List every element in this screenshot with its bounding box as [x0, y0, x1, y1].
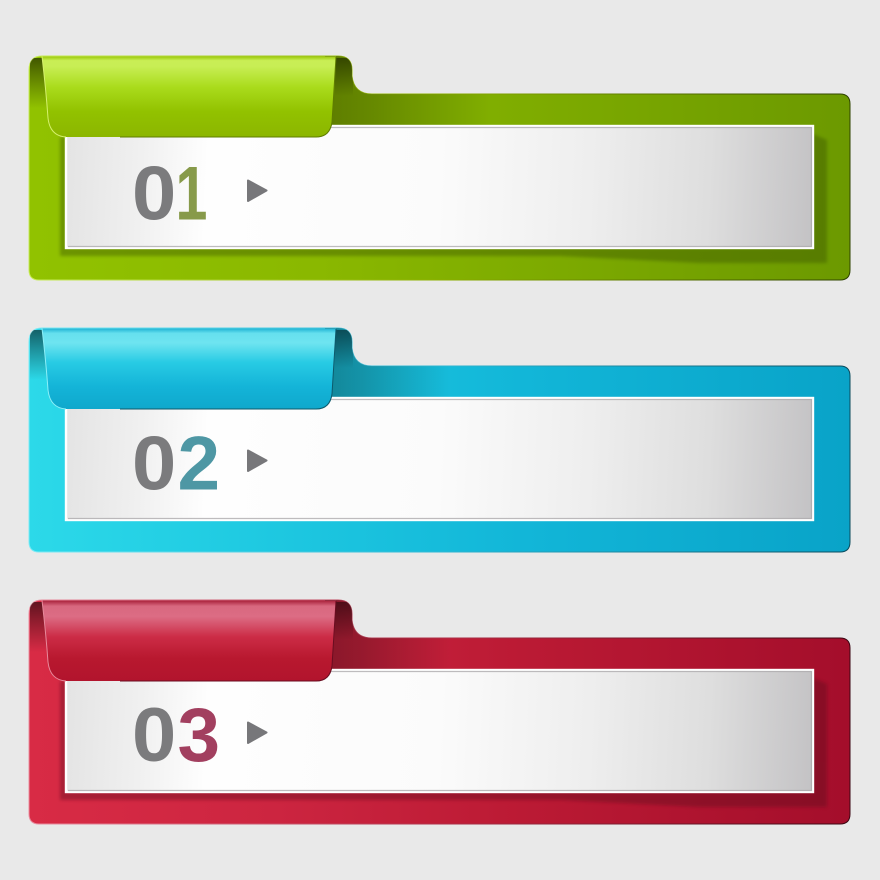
red back frame — [29, 600, 850, 824]
white card — [66, 670, 813, 792]
number 02: 0 — [132, 420, 176, 506]
red folded tab — [42, 600, 336, 681]
number 01 — [132, 150, 207, 236]
green folded tab — [42, 56, 336, 137]
panel: banner 01 green — [29, 56, 850, 280]
number 02 — [132, 420, 220, 506]
white card — [66, 398, 813, 520]
blue folded tab — [42, 328, 336, 409]
panel: banner 03 red — [29, 600, 850, 824]
number 03 — [132, 691, 220, 778]
fold shadows — [30, 56, 827, 263]
blue back frame — [29, 328, 850, 552]
number 01: 0 — [132, 150, 176, 236]
white card — [66, 126, 813, 248]
arrow icon — [248, 450, 266, 471]
number 03: 3 — [178, 693, 220, 778]
arrow icon — [248, 180, 266, 201]
fold shadows — [30, 328, 450, 398]
fold shadows — [30, 600, 827, 807]
number 03: 0 — [132, 691, 176, 778]
arrow icon — [248, 722, 266, 743]
green back frame — [29, 56, 850, 280]
number 01: 1 — [176, 152, 207, 236]
panel: banner 02 blue — [29, 328, 850, 552]
number 02: 2 — [178, 422, 220, 506]
